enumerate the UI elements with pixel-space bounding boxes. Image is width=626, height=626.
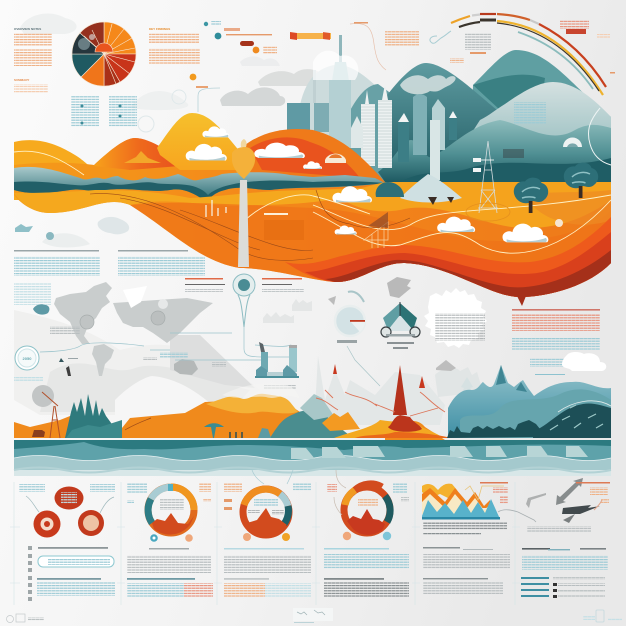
orange red right hill [245, 129, 385, 182]
panel 4: text [324, 554, 409, 597]
trees [514, 178, 548, 213]
landscape strip [14, 356, 611, 440]
callouts with dots [204, 21, 277, 54]
starburst note [424, 288, 487, 348]
footer logo left [6, 614, 44, 622]
text blocks: under band [185, 278, 304, 292]
red squiggle lines [316, 390, 445, 416]
footer phone icon right [583, 610, 622, 622]
dark flow lines [90, 190, 410, 260]
panel 1: three red circles [19, 484, 115, 538]
small vehicle [32, 430, 45, 437]
teal water band [14, 440, 611, 476]
panel 3: text [224, 555, 311, 598]
small grey cloud icons left [15, 217, 129, 248]
snowy mound centerpiece [400, 174, 462, 202]
small red spires [333, 364, 425, 388]
mountain: front layered ridge [378, 120, 611, 182]
orange marker with connector [190, 74, 220, 112]
deeper orange lower [130, 203, 611, 297]
flag banner [290, 32, 331, 40]
small gauge dot [555, 219, 563, 227]
panel 3: donut chart [224, 470, 311, 550]
circular badge left: 2050 [23, 356, 32, 361]
text blocks: mid left [14, 250, 205, 305]
towers [287, 35, 457, 180]
forest silhouette [447, 420, 540, 438]
red hill [94, 138, 192, 170]
main flowing band [14, 113, 611, 306]
white root marks [206, 200, 226, 217]
factory icons [255, 342, 299, 389]
fence graphic [364, 222, 388, 248]
small circle notes [138, 90, 186, 132]
gauge pie [328, 291, 380, 386]
panel 4: donut chart [324, 470, 409, 550]
circle arc on right mountain [588, 108, 611, 165]
lattice tower [466, 141, 510, 221]
background clouds top [20, 13, 328, 110]
grey mountain backdrop [14, 310, 260, 415]
mountain: back right inner [473, 75, 545, 110]
panel 1: icons column and text [28, 546, 115, 601]
red layered bottom strata [285, 217, 611, 297]
map connector lines [40, 327, 294, 360]
panel 6: text and list [521, 548, 608, 598]
pie chart [72, 22, 136, 86]
yellow center hill [157, 113, 243, 170]
orange and teal small mountains [322, 412, 360, 431]
text block: red heading top right [560, 20, 615, 74]
text block: top left notes: SUMMARY [14, 78, 29, 82]
mini peak icon [124, 151, 161, 163]
text block: top left notes: OVERVIEW NOTES [14, 27, 41, 31]
globe on wheels [381, 277, 420, 349]
cloud behind towers [313, 51, 358, 80]
text block: center top notes [149, 27, 200, 64]
text block: center right notes [350, 22, 491, 70]
dark hill right [533, 403, 611, 438]
dome marker [563, 138, 582, 147]
panel 5: area chart [422, 482, 536, 535]
text block: top left notes [14, 27, 52, 93]
yellow band under teal [14, 187, 380, 213]
panel 6: arrows [526, 478, 610, 532]
teal mountains right [448, 365, 611, 438]
band outlines [125, 418, 151, 430]
panel: lower panel frames [10, 482, 520, 605]
panel 5: text [423, 547, 510, 594]
teal pines left [65, 394, 122, 438]
footer map center [293, 608, 333, 623]
main orange mass [14, 138, 611, 297]
panel 2: text [127, 555, 213, 598]
yellow hill left [14, 140, 120, 200]
grey silhouette charts [263, 299, 312, 323]
pin badge [233, 274, 255, 327]
circular badge left [14, 346, 43, 381]
mountain: dark foreground layer [400, 158, 611, 182]
signal boxes [473, 158, 481, 172]
yellow right plain [335, 182, 611, 228]
crane red [42, 392, 60, 438]
red spire [393, 365, 407, 415]
clouds on band [202, 126, 229, 137]
dome on hill [325, 154, 346, 163]
mountain: back right [470, 50, 611, 182]
teal cloud icon [33, 304, 49, 315]
text block: center top notes: KEY FINDINGS [149, 27, 170, 31]
mountain: center [385, 63, 560, 182]
text blocks: right [512, 309, 606, 375]
cloud cap on mountain [400, 75, 456, 94]
mountains and skyline [287, 35, 611, 182]
white flow lines [14, 151, 611, 253]
light tower with balloon [232, 139, 255, 267]
band text [264, 220, 304, 240]
small map labels [50, 326, 226, 376]
teal legend lists [71, 95, 137, 127]
text on mountain [514, 102, 546, 124]
panel 2: donut chart [127, 483, 211, 550]
teal wave band [14, 167, 385, 200]
mountain: pale front [440, 82, 611, 182]
foggy peaks [315, 356, 445, 425]
white fir trees [458, 377, 477, 400]
city back haze [296, 65, 395, 182]
teal right land [270, 410, 356, 438]
top right arc gauge [451, 14, 606, 95]
trees and small details [204, 423, 224, 438]
tabs on water [291, 446, 588, 459]
world map [54, 282, 213, 376]
orange mountain [14, 400, 300, 438]
